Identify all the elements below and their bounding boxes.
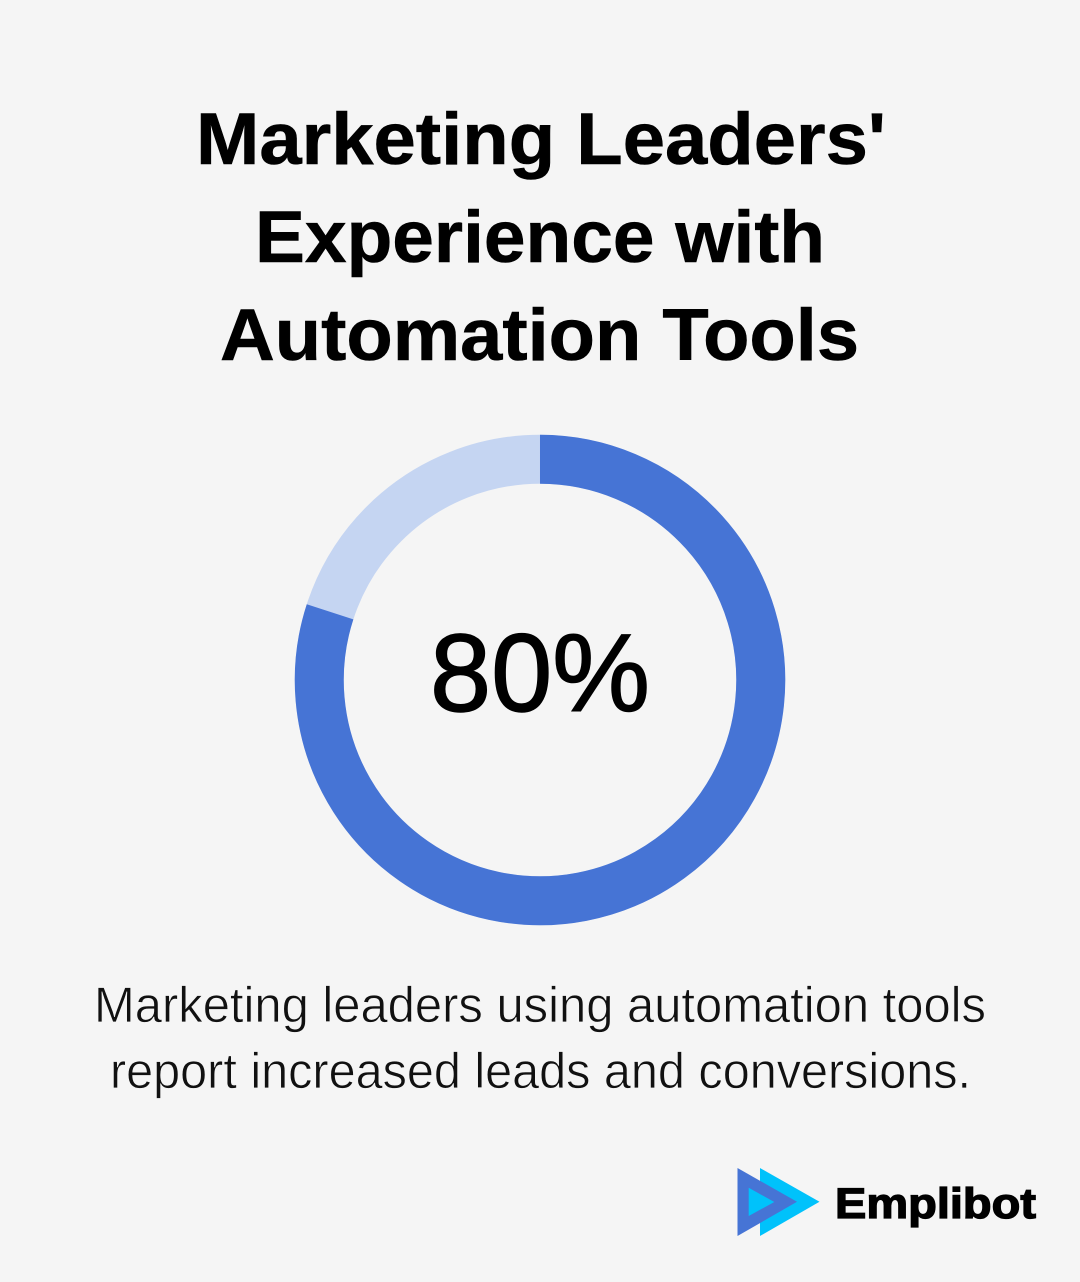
description [94,977,986,1099]
donut chart: 80% [319,459,761,901]
description: report increased leads and conversions. [110,1043,971,1099]
logo: Emplibot [738,1168,1036,1236]
title [196,99,886,376]
icon: play triangles [738,1168,820,1236]
title: Marketing Leaders' [196,99,886,180]
logo wordmark: Emplibot [835,1180,1036,1228]
center value: 80% [430,612,650,735]
title: Experience with [255,197,825,278]
title: Automation Tools [220,295,859,376]
description: Marketing leaders using automation tools [94,977,986,1033]
